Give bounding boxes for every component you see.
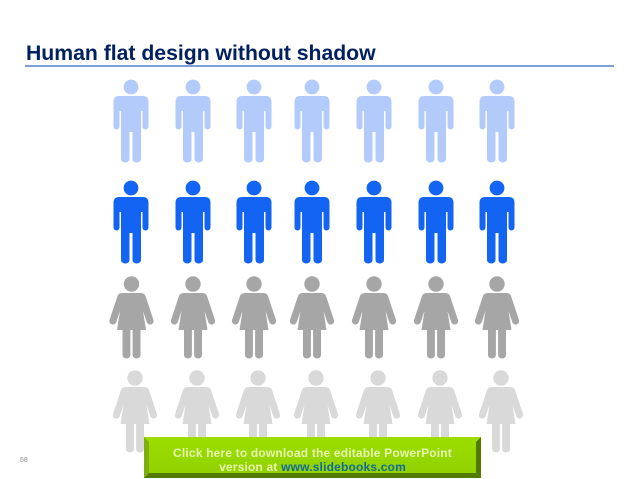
row: light grey women [113,370,523,453]
download button [144,437,481,478]
row: light blue men [114,80,514,163]
title underline [25,65,614,67]
button label: version at www.slidebooks.com [219,460,406,474]
row: dark grey women [109,276,519,359]
title: Human flat design without shadow [26,42,376,65]
button label [173,446,452,474]
row: bright blue men [114,181,514,264]
page number: 58 [20,457,28,464]
button label: Click here to download the editable PowerPoint [173,446,452,460]
